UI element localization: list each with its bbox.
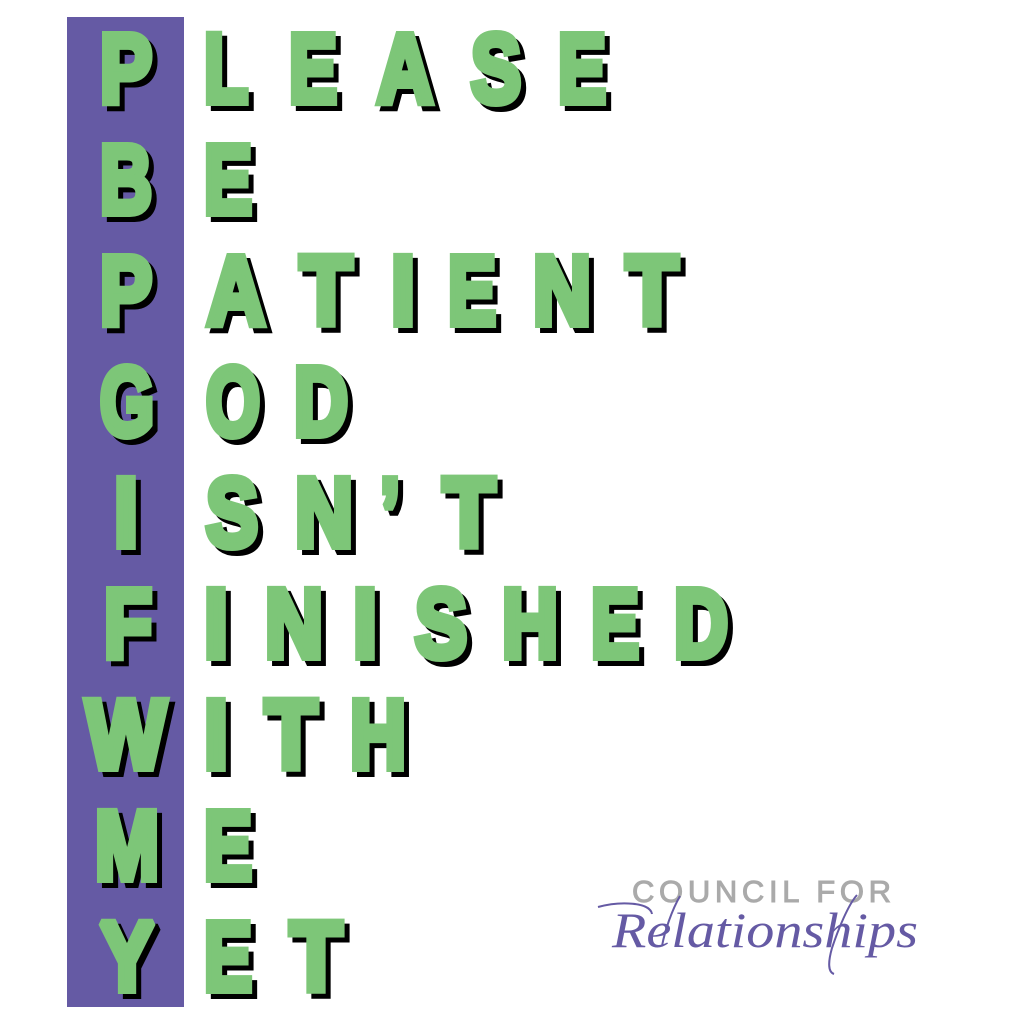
row: Isn't: T bbox=[443, 458, 495, 567]
row: God bbox=[100, 347, 348, 456]
row: Please bbox=[100, 14, 606, 123]
row: Please: L bbox=[204, 14, 248, 123]
row: With: H bbox=[350, 680, 406, 789]
row: Finished: H bbox=[502, 569, 558, 678]
row: Isn't: S bbox=[206, 458, 258, 567]
row: With: I bbox=[204, 680, 228, 789]
row: Yet bbox=[100, 902, 342, 1011]
logo: Council for Relationships: COUNCIL FOR bbox=[632, 874, 891, 909]
row: Patient: N bbox=[533, 236, 591, 345]
row: Finished: F bbox=[104, 569, 152, 678]
row: Me bbox=[95, 791, 252, 900]
row: Patient: A bbox=[207, 236, 265, 345]
row: Isn't: N bbox=[295, 458, 353, 567]
row: Be bbox=[100, 125, 252, 234]
row: Please: E bbox=[558, 14, 606, 123]
row: God: D bbox=[294, 347, 348, 456]
row: With: W bbox=[86, 680, 166, 789]
row: Be: B bbox=[100, 125, 152, 234]
row: Yet: E bbox=[204, 902, 252, 1011]
row: Be: E bbox=[204, 125, 252, 234]
row: Finished: I bbox=[204, 569, 228, 678]
row: Finished: I bbox=[353, 569, 377, 678]
row: Patient: T bbox=[626, 236, 678, 345]
row: God: O bbox=[206, 347, 260, 456]
logo: Council for Relationships bbox=[598, 874, 918, 974]
row: Me: M bbox=[95, 791, 159, 900]
row: Finished bbox=[104, 569, 728, 678]
row: Please: A bbox=[377, 14, 433, 123]
row: With: T bbox=[265, 680, 317, 789]
row: Isn't: ’ bbox=[380, 458, 400, 567]
row: Isn't: I bbox=[114, 458, 138, 567]
logo: Council for Relationships: Relationships bbox=[611, 902, 918, 958]
row: God: G bbox=[100, 347, 154, 456]
row: Yet: Y bbox=[100, 902, 154, 1011]
row: Patient: E bbox=[448, 236, 496, 345]
row: Me: E bbox=[204, 791, 252, 900]
row: Please: S bbox=[471, 14, 521, 123]
row: Finished: E bbox=[591, 569, 639, 678]
row: Finished: S bbox=[415, 569, 467, 678]
row: Patient bbox=[100, 236, 678, 345]
panel: purple acronym column bbox=[67, 17, 184, 1007]
row: Patient: I bbox=[391, 236, 415, 345]
row: Finished: N bbox=[265, 569, 323, 678]
row: Isn't bbox=[114, 458, 495, 567]
row: Yet: T bbox=[290, 902, 342, 1011]
row: Please: P bbox=[100, 14, 152, 123]
row: Patient: P bbox=[100, 236, 152, 345]
row: Patient: T bbox=[300, 236, 352, 345]
row: Please: E bbox=[289, 14, 337, 123]
row: With bbox=[86, 680, 406, 789]
row: Finished: D bbox=[674, 569, 728, 678]
